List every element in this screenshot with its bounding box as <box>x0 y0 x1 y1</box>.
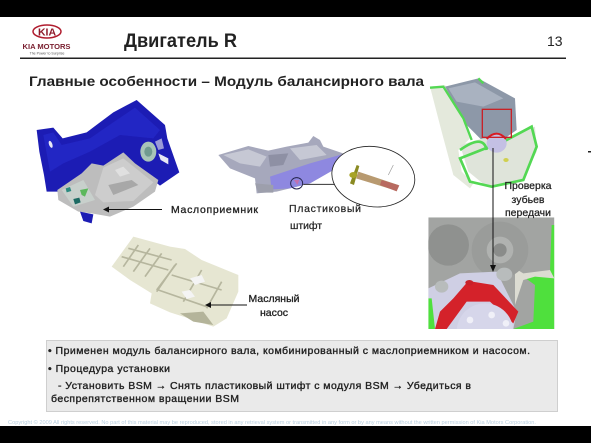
header rule <box>20 58 566 59</box>
panel: notes: • Процедура установки <box>48 363 170 375</box>
label: oil pump: насос <box>260 307 288 319</box>
label: plastic pin <box>289 203 361 232</box>
image: balance shaft module <box>218 136 345 193</box>
label: plastic pin: штифт <box>290 220 322 232</box>
logo: KIA Motors: KIA MOTORS <box>22 42 70 51</box>
bottom black bar <box>0 426 591 443</box>
image: engine with green frame <box>430 78 537 188</box>
callout: plastic pin enlarged <box>328 141 419 212</box>
arrow: oil pump <box>205 302 247 308</box>
label: gear teeth check: передачи <box>505 207 551 219</box>
page number: 13 <box>547 33 563 49</box>
small dash mark <box>588 151 591 152</box>
panel: notes: • Применен модуль балансирного вала, комбинированный с маслоприемником и насосом. <box>48 345 530 357</box>
logo: KIA Motors: KIA <box>38 26 56 38</box>
image: oil pump housing <box>112 237 238 327</box>
label: oil pickup: Маслоприемник <box>171 204 258 216</box>
subtitle: Главные особенности – Модуль балансирного вала <box>29 73 424 89</box>
label: plastic pin: Пластиковый <box>289 203 361 215</box>
top black bar <box>0 0 591 17</box>
arrow: oil pickup <box>103 206 162 212</box>
label: gear teeth check <box>504 180 552 219</box>
image: gear detail <box>428 218 554 329</box>
panel: notes: беспрепятственном вращении BSM <box>51 393 239 405</box>
panel: notes <box>46 340 558 412</box>
logo: KIA Motors <box>22 25 70 56</box>
label: oil pump: Масляный <box>249 293 300 305</box>
label: oil pump <box>249 293 300 319</box>
panel: notes: - Установить BSM → Снять пластиковый штифт с модуля BSM → Убедиться в <box>58 380 471 392</box>
logo: KIA Motors: The Power to Surprise <box>30 52 64 56</box>
title: Двигатель R <box>124 30 237 52</box>
image: blue engine block with oil pickup <box>37 100 179 223</box>
arrow: gear teeth check <box>490 148 496 272</box>
copyright footer: Copyright © 2009 All rights reserved. No part of this material may be reproduced, stored in any retrieval system or transmitted in any form or by any means without the written permission of Kia Motors Corporation. <box>8 419 536 426</box>
label: gear teeth check: Проверка <box>504 180 552 192</box>
label: gear teeth check: зубьев <box>512 194 545 206</box>
